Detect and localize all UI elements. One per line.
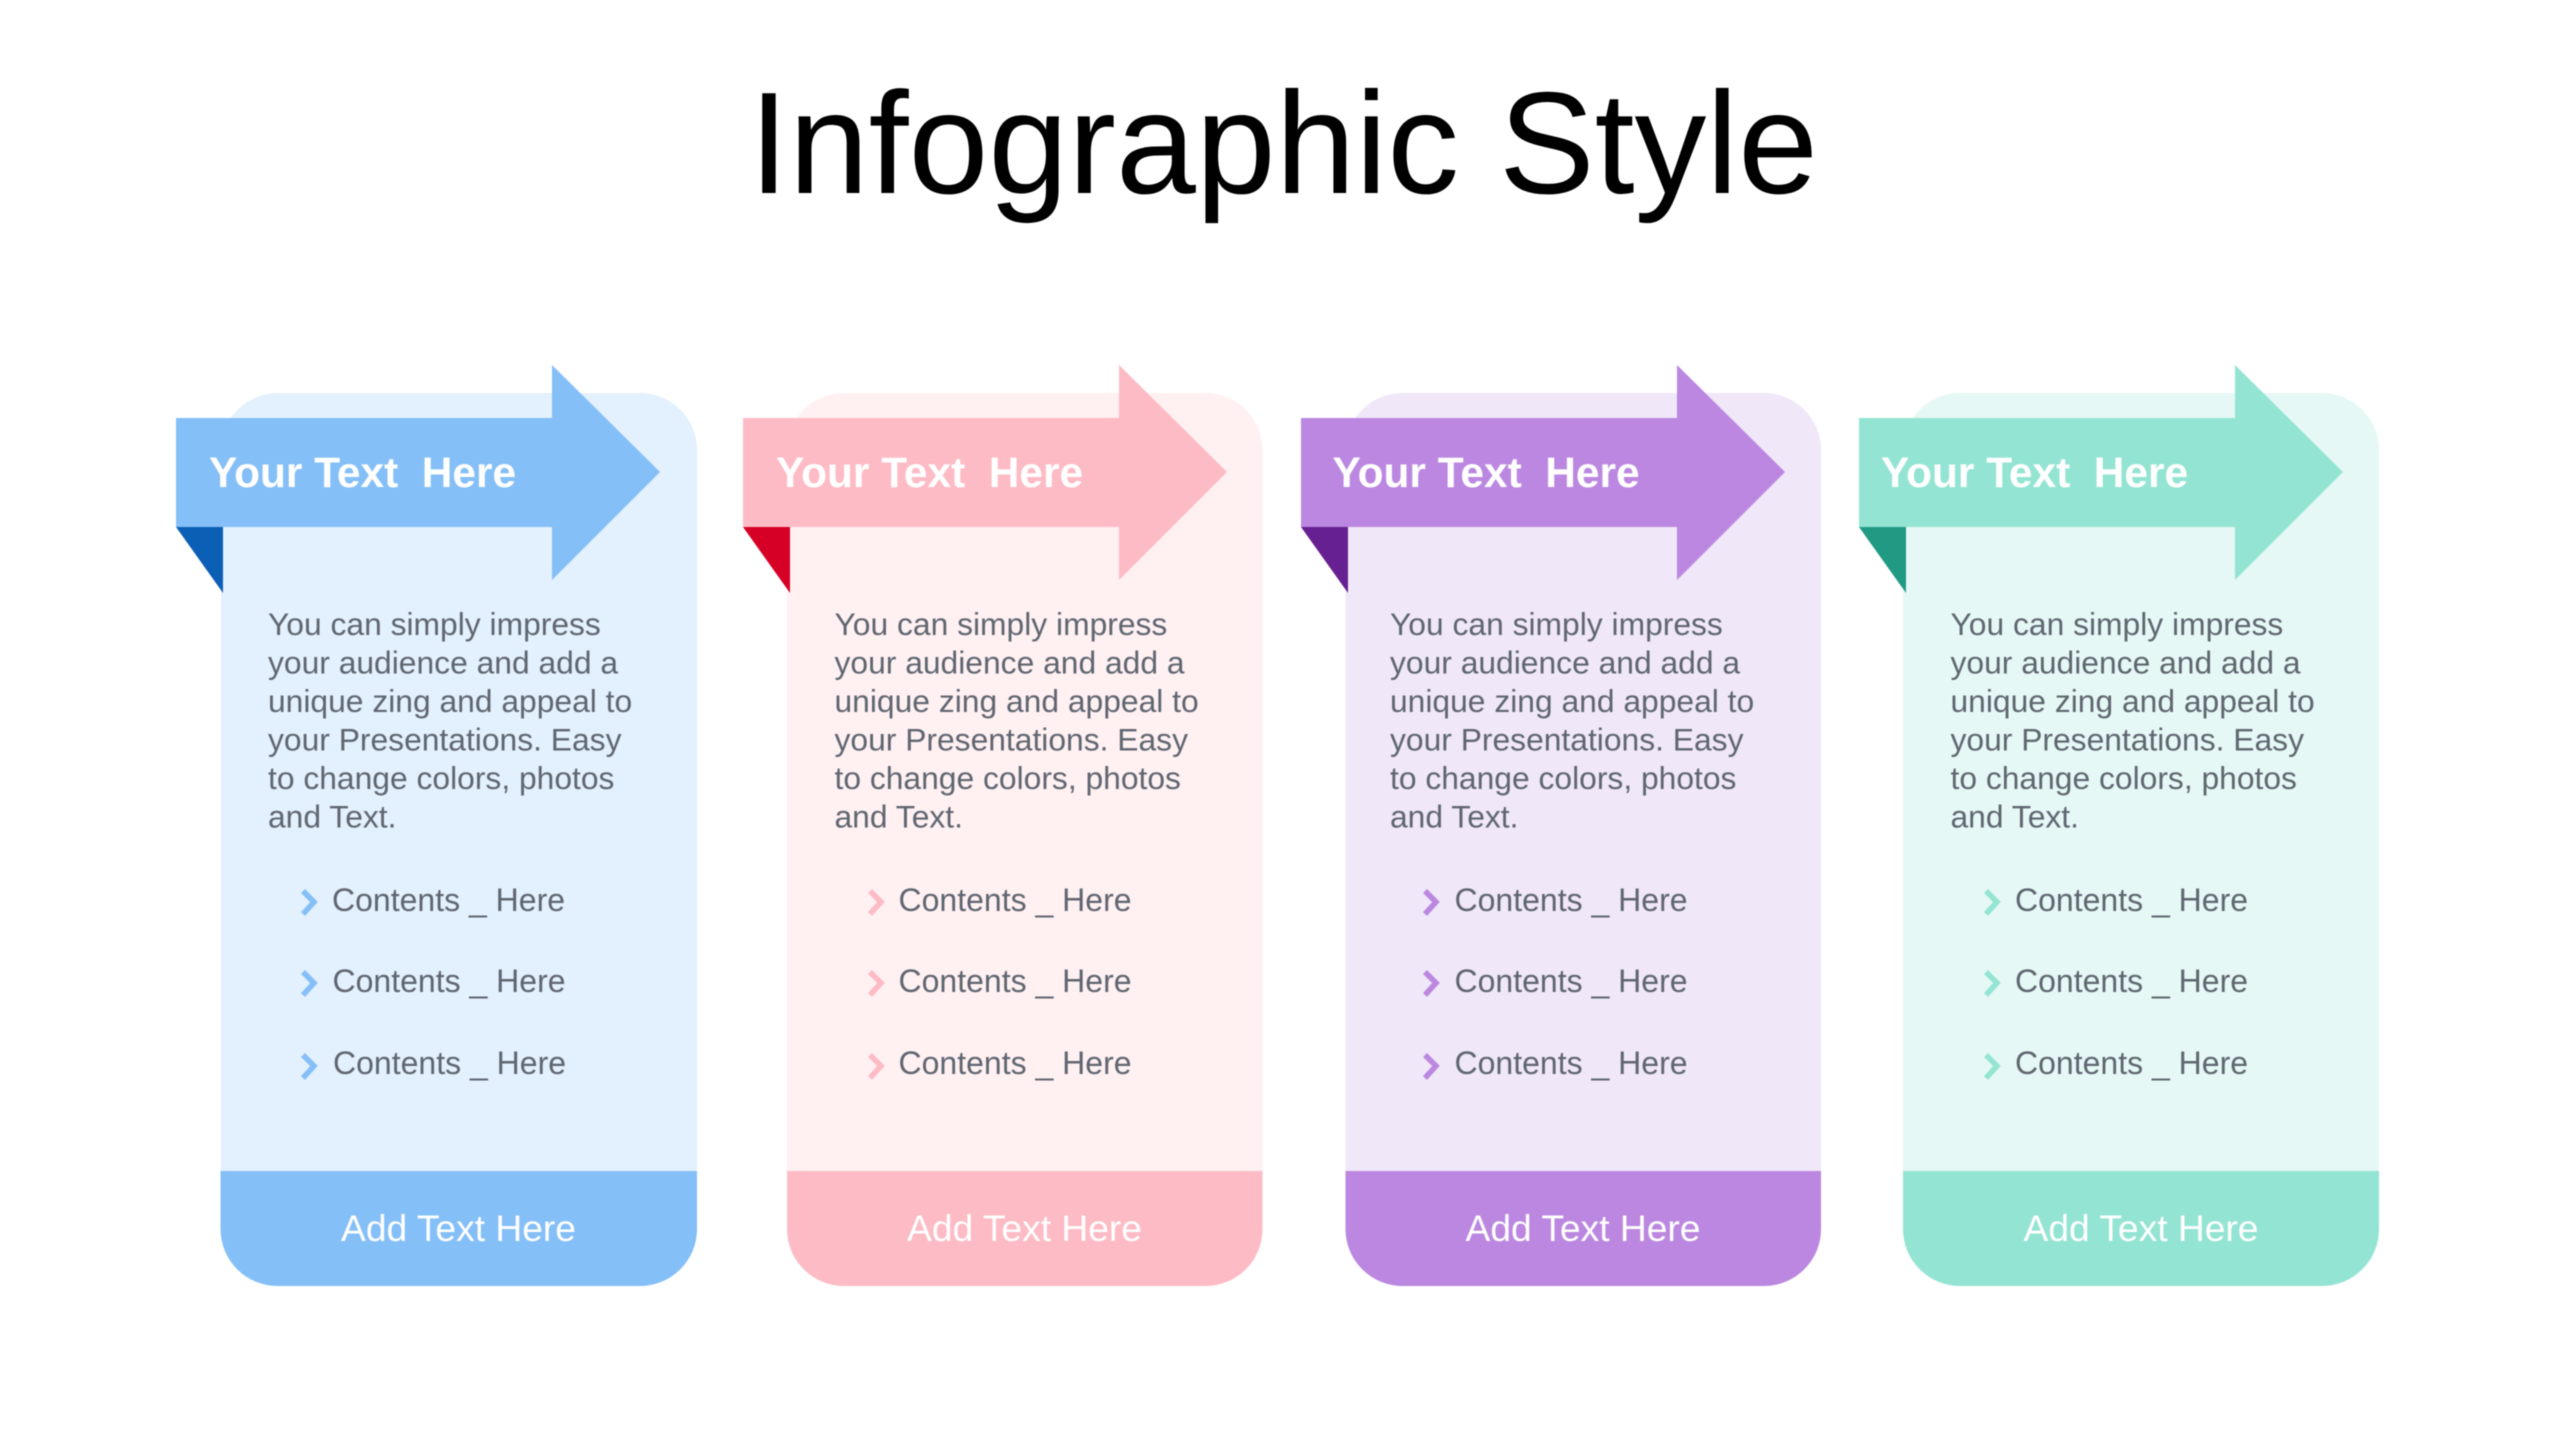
body text: to change colors, photos: [1390, 760, 1736, 796]
body text: and Text.: [268, 798, 396, 834]
body text: to change colors, photos: [1950, 760, 2297, 796]
bullet icon: [1425, 1055, 1436, 1078]
bullet list: [1986, 882, 2248, 1081]
bullet list: [870, 882, 1132, 1081]
footer label: Add Text Here: [2024, 1207, 2258, 1249]
bullet text: Contents _ Here: [1454, 1045, 1688, 1081]
bullet icon: [1425, 972, 1436, 995]
panel: teal column: [1859, 365, 2379, 1286]
bullet icon: [1986, 891, 1997, 914]
footer label: Add Text Here: [1466, 1207, 1700, 1249]
bullet list: [303, 882, 566, 1081]
body text: You can simply impress: [268, 606, 601, 642]
panel: pink column: [743, 365, 1262, 1286]
panel: blue column: [176, 365, 697, 1286]
body text: and Text.: [1950, 798, 2079, 834]
body text: your audience and add a: [268, 644, 618, 680]
arrow heading: Your Text Here: [1881, 449, 2188, 496]
body text: your Presentations. Easy: [1950, 722, 2304, 758]
ribbon fold: [1859, 527, 1906, 593]
ribbon fold: [176, 527, 223, 593]
bullet text: Contents _ Here: [2015, 1045, 2248, 1081]
bullet text: Contents _ Here: [2015, 882, 2248, 918]
arrow heading: Your Text Here: [776, 449, 1083, 496]
bullet icon: [303, 972, 314, 995]
bullet icon: [303, 891, 314, 914]
footer band: [787, 1171, 1262, 1286]
footer label: Add Text Here: [341, 1207, 576, 1249]
body text: your audience and add a: [1390, 644, 1740, 680]
ribbon fold: [1301, 527, 1348, 593]
ribbon fold: [743, 527, 790, 593]
body text: your Presentations. Easy: [1390, 722, 1744, 758]
bullet text: Contents _ Here: [333, 1045, 566, 1081]
panel background: [221, 393, 697, 1286]
body text: and Text.: [1390, 798, 1518, 834]
arrow banner: [1859, 365, 2343, 580]
bullet text: Contents _ Here: [898, 882, 1132, 918]
body text: unique zing and appeal to: [1390, 683, 1754, 719]
bullet icon: [1986, 972, 1997, 995]
panel: purple column: [1301, 365, 1821, 1286]
bullet icon: [1986, 1055, 1997, 1078]
footer band: [220, 1171, 697, 1286]
body text: your Presentations. Easy: [834, 722, 1188, 758]
title: Infographic Style: [749, 62, 1818, 224]
arrow banner: [176, 365, 660, 580]
footer band: [1903, 1171, 2379, 1286]
panel background: [1903, 393, 2379, 1286]
body text: your audience and add a: [1950, 644, 2301, 680]
body text: and Text.: [834, 798, 963, 834]
bullet icon: [870, 891, 881, 914]
bullet text: Contents _ Here: [332, 963, 566, 999]
arrow heading: Your Text Here: [209, 449, 516, 496]
body text: unique zing and appeal to: [268, 683, 632, 719]
bullet icon: [303, 1055, 314, 1078]
bullet text: Contents _ Here: [2015, 963, 2248, 999]
panel background: [787, 393, 1262, 1286]
footer label: Add Text Here: [907, 1207, 1142, 1249]
body text: You can simply impress: [1950, 606, 2283, 642]
footer band: [1346, 1171, 1821, 1286]
body text: unique zing and appeal to: [1950, 683, 2315, 719]
body text: your Presentations. Easy: [268, 722, 622, 758]
body text: to change colors, photos: [834, 760, 1181, 796]
bullet icon: [870, 972, 881, 995]
bullet icon: [1425, 891, 1436, 914]
panel background: [1346, 393, 1821, 1286]
arrow heading: Your Text Here: [1332, 449, 1640, 496]
bullet icon: [870, 1055, 881, 1078]
body text: You can simply impress: [834, 606, 1167, 642]
bullet list: [1425, 882, 1688, 1081]
bullet text: Contents _ Here: [898, 963, 1132, 999]
bullet text: Contents _ Here: [1454, 882, 1688, 918]
bullet text: Contents _ Here: [898, 1045, 1132, 1081]
body text: You can simply impress: [1390, 606, 1723, 642]
arrow banner: [743, 365, 1227, 580]
body text: unique zing and appeal to: [834, 683, 1199, 719]
bullet text: Contents _ Here: [332, 882, 565, 918]
arrow banner: [1301, 365, 1785, 580]
body text: your audience and add a: [834, 644, 1185, 680]
bullet text: Contents _ Here: [1454, 963, 1688, 999]
body text: to change colors, photos: [268, 760, 614, 796]
